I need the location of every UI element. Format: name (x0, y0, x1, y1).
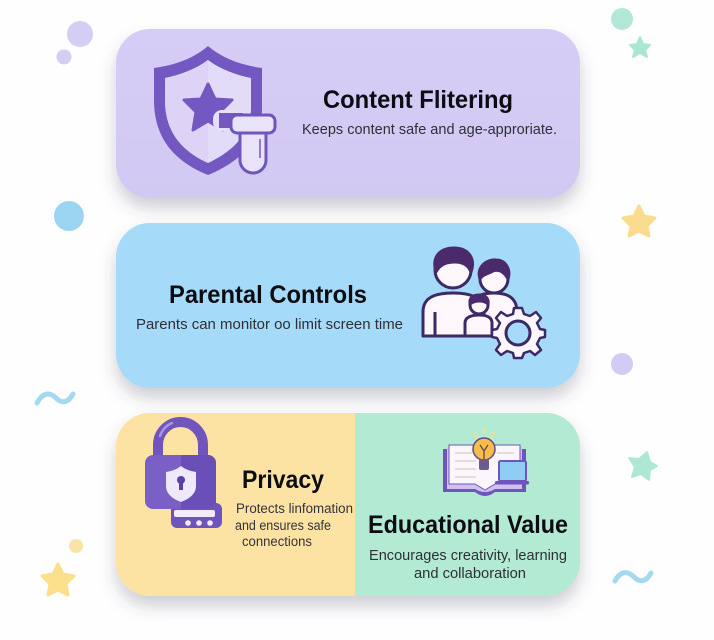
decoration: yellow star right (623, 206, 655, 236)
icon: family with gear (423, 248, 545, 358)
panel: privacy and educational value (116, 413, 580, 596)
decoration: yellow small circle (69, 539, 83, 553)
text: educational value description: and collaboration (414, 566, 526, 582)
icon: padlock with shield (145, 422, 222, 528)
text: privacy description: and ensures safe (235, 518, 331, 533)
text: educational value description: Encourages creativity, learning (369, 548, 567, 564)
text: privacy description (235, 501, 353, 549)
panel: parental controls (116, 223, 580, 388)
icon: open book with bulb and laptop (443, 428, 529, 496)
text: parental controls description: Parents can monitor oo limit screen time (136, 317, 403, 333)
text: educational value description (369, 548, 567, 582)
decoration: left squiggle (37, 394, 73, 403)
heading: content filtering: Content Flitering (323, 86, 513, 114)
panel: content filtering (116, 29, 580, 198)
decoration: right squiggle (615, 573, 651, 581)
decoration: blue circle (54, 201, 84, 231)
text: privacy description: connections (242, 534, 312, 549)
decoration: yellow star left (42, 564, 74, 595)
text: content filtering description: Keeps content safe and age-approriate. (302, 122, 557, 138)
decoration: mint star small (630, 37, 650, 57)
decoration: mint star right (629, 452, 657, 480)
text: privacy description: Protects linfomation (236, 501, 353, 516)
heading: parental controls: Parental Controls (169, 281, 367, 309)
icon: shield with star and filter tube (154, 46, 275, 175)
heading: privacy: Privacy (242, 466, 324, 494)
decoration: lilac circle (611, 353, 633, 375)
decoration: mint circle (611, 8, 633, 30)
decoration: top left circles (56, 21, 93, 64)
heading: educational value: Educational Value (368, 511, 568, 539)
